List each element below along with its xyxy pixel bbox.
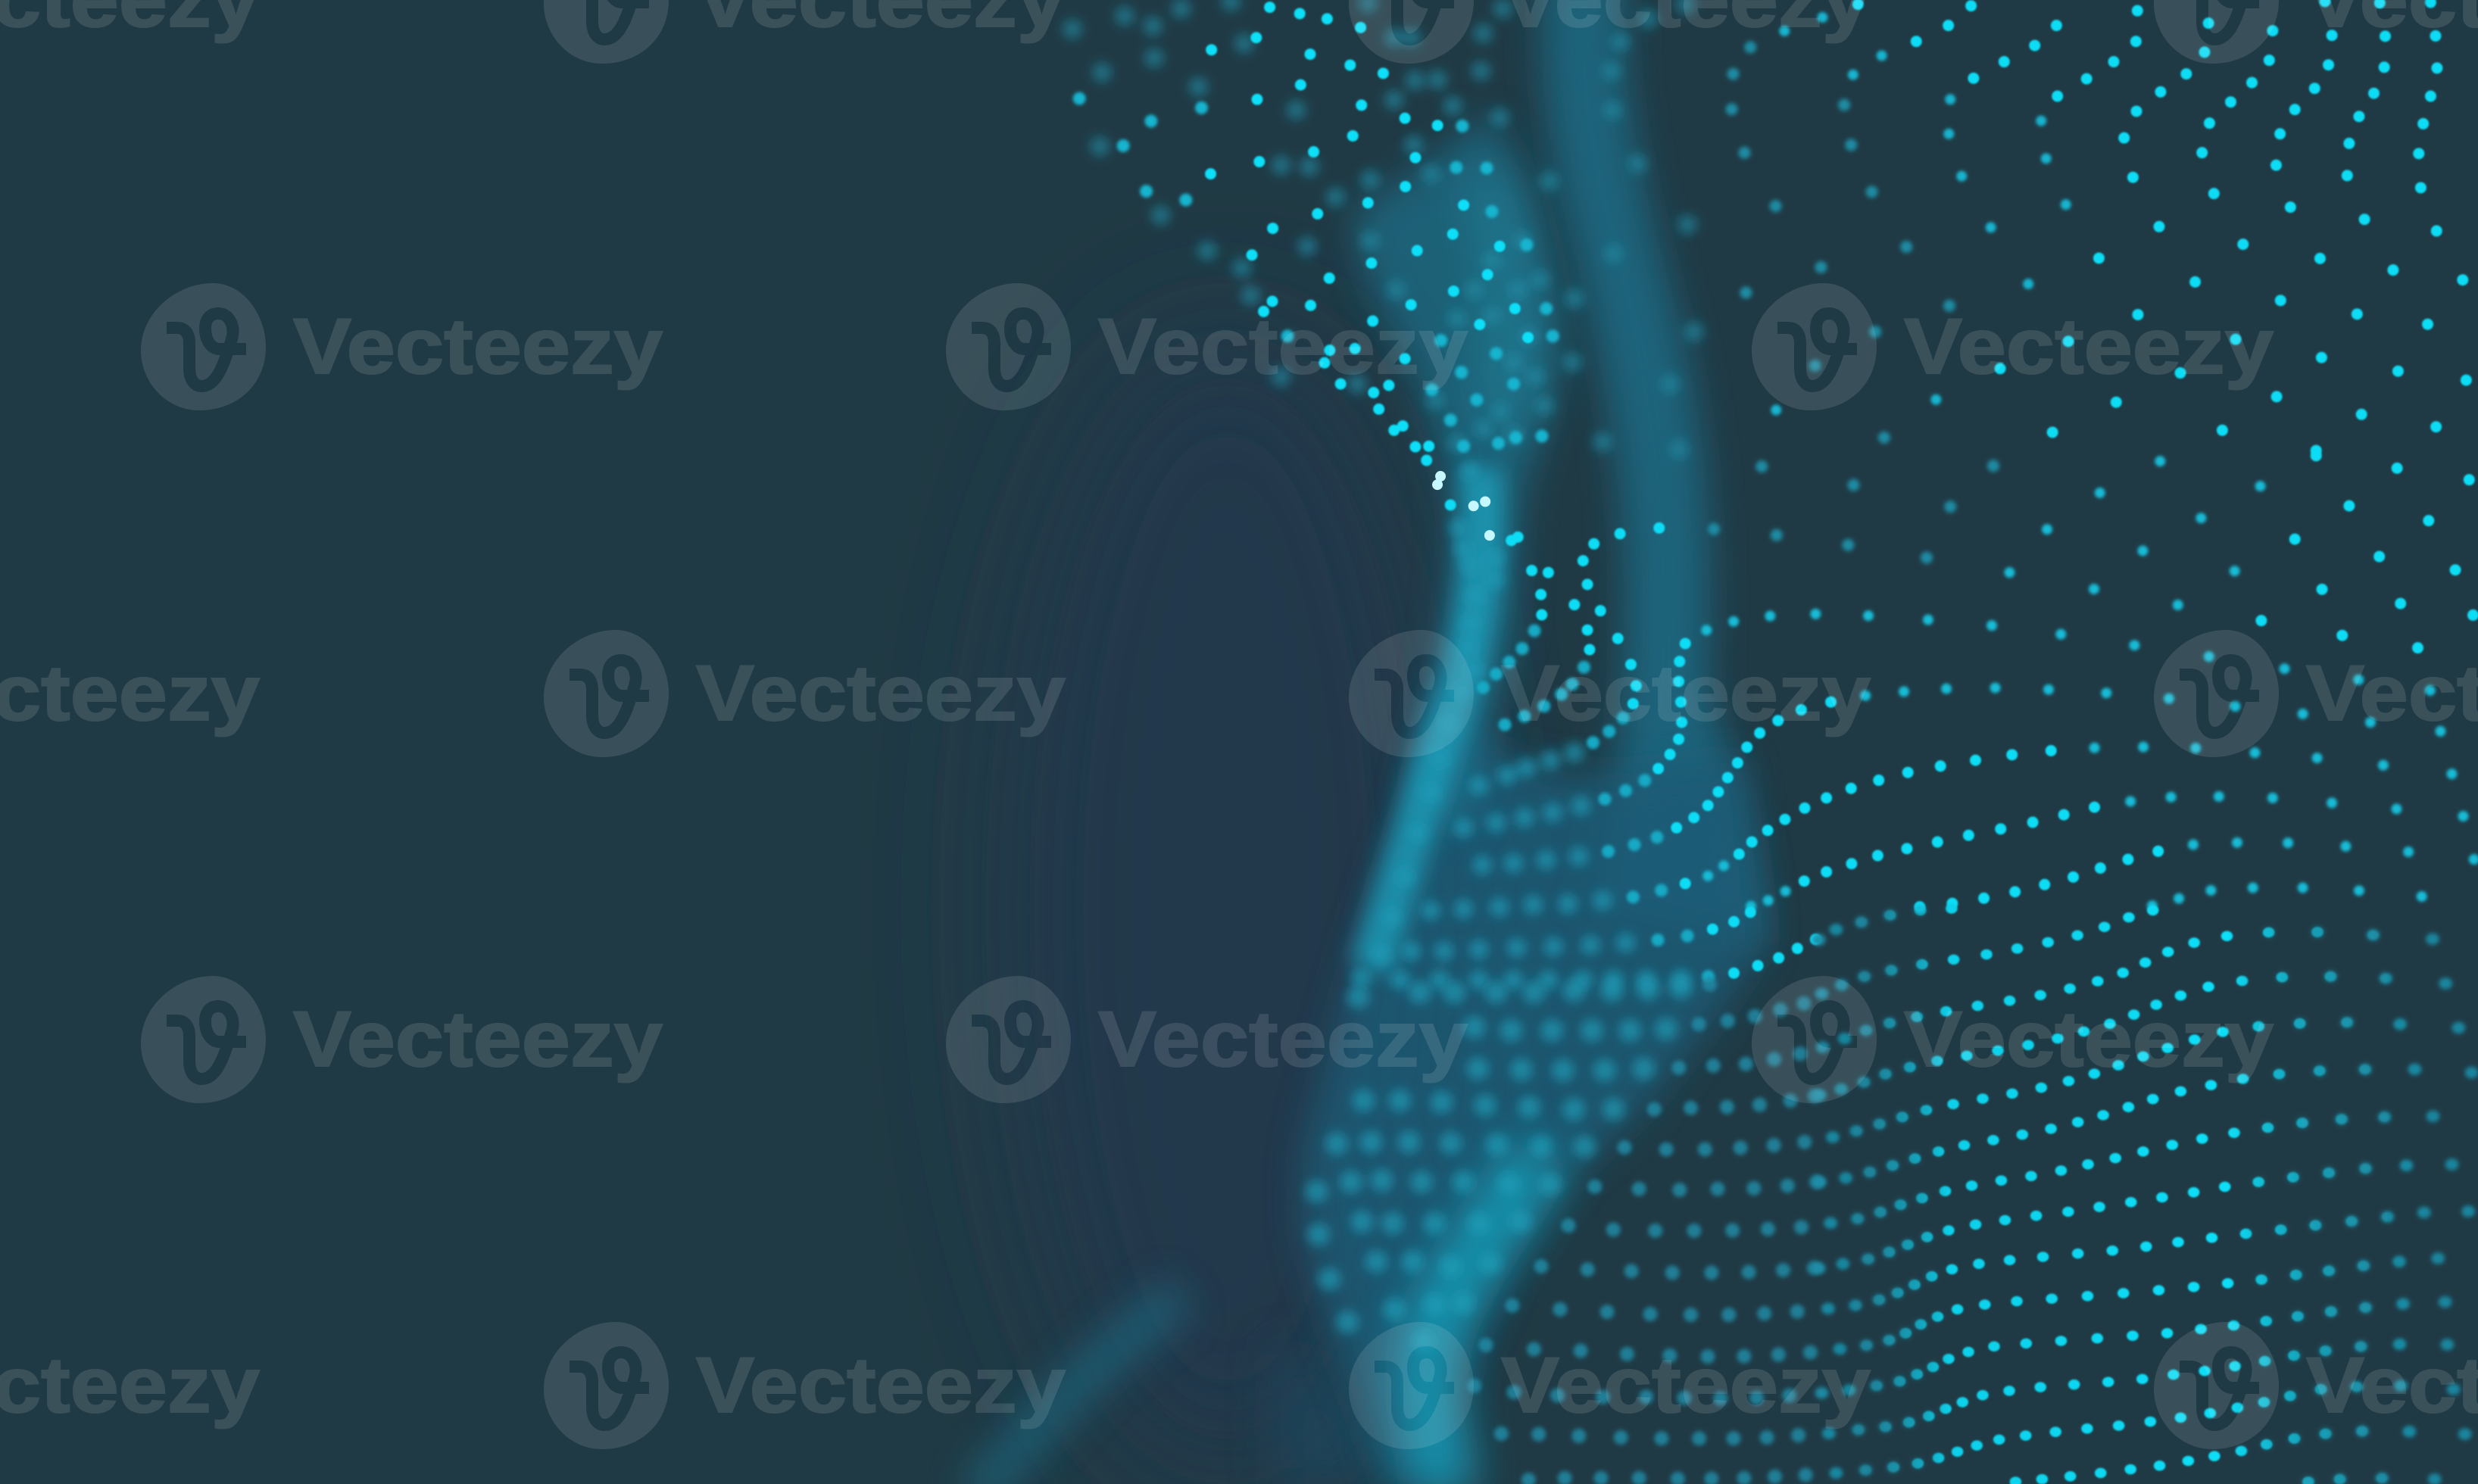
watermark row 2 centre right: Vecteezy — [1501, 650, 1871, 737]
watermark row 3 right: Vecteezy — [1904, 996, 2274, 1083]
watermark row 3 centre: Vecteezy — [1098, 996, 1468, 1083]
blue haze behind the wave — [1007, 333, 1447, 1484]
watermark row 3 left — [141, 976, 663, 1103]
watermark row 1 left: Vecteezy — [293, 303, 663, 391]
dots: sharp curls on wave centre — [1427, 460, 1815, 973]
watermark row 4 centre left: Vecteezy — [696, 1342, 1066, 1429]
watermark row 0 centre left — [544, 0, 1066, 64]
dots: soft lower wave tail — [1475, 984, 1817, 1479]
dots: big blurred lower wave — [1316, 987, 1681, 1341]
dots: blurred cluster upper centre — [1072, 2, 1694, 449]
dots: sharp lower right field — [1819, 909, 2472, 1482]
watermark row 4 centre right: Vecteezy — [1501, 1342, 1871, 1429]
watermark row 1 left — [141, 283, 663, 410]
watermark row 2 centre right — [1349, 630, 1871, 757]
ribbon: main upper crest — [1356, 114, 1561, 833]
dots: sharp cluster upper centre — [1211, 8, 1528, 447]
ribbon core: lower glow — [1427, 1151, 1537, 1484]
watermark row 1 centre: Vecteezy — [1098, 303, 1468, 391]
watermark row 0 centre right — [1349, 0, 1871, 64]
dots: white hot points — [1437, 476, 1490, 535]
dots: large blurred on wave centre — [1362, 471, 1681, 980]
dots: medium middle right — [1706, 461, 2474, 906]
watermark row 1 right: Vecteezy — [1904, 303, 2274, 391]
watermark row 2 centre left — [544, 630, 1066, 757]
watermark row 0 right — [2154, 0, 2478, 64]
watermark row 4 centre left — [544, 1322, 1066, 1449]
ribbon core: neck glow — [1371, 469, 1483, 969]
watermark row 3 centre — [946, 976, 1468, 1103]
watermark row 3 left: Vecteezy — [293, 996, 663, 1083]
watermark row 4 centre right — [1349, 1322, 1871, 1449]
ribbon: rear vertical band — [1542, 0, 1765, 946]
watermark row 1 right — [1752, 283, 2274, 410]
ribbon core: upper crest glow — [1484, 174, 1511, 424]
dots: soft cluster upper centre — [1079, 98, 1553, 446]
dots: faint upper right — [1732, 47, 1949, 438]
dots: bright upper right — [1858, 2, 2466, 450]
dots: bright middle right — [1708, 456, 2473, 907]
haze: bottom of wave — [1280, 1348, 1386, 1484]
dots: medium blurred on wave centre — [1483, 631, 1709, 977]
dots: medium upper right — [1776, 17, 2066, 410]
ribbon: faint lower left — [977, 1295, 1181, 1484]
dots: soft edges of lower right field — [1819, 909, 2472, 1482]
watermark row 1 centre — [946, 283, 1468, 410]
watermark row 2 right — [2154, 630, 2478, 757]
watermark row 4 right — [2154, 1322, 2478, 1449]
wave body — [1303, 681, 1765, 1484]
watermark row 3 right — [1752, 976, 2274, 1103]
dots: faint middle right — [1714, 466, 1993, 558]
watermark row 2 centre left: Vecteezy — [696, 650, 1066, 737]
